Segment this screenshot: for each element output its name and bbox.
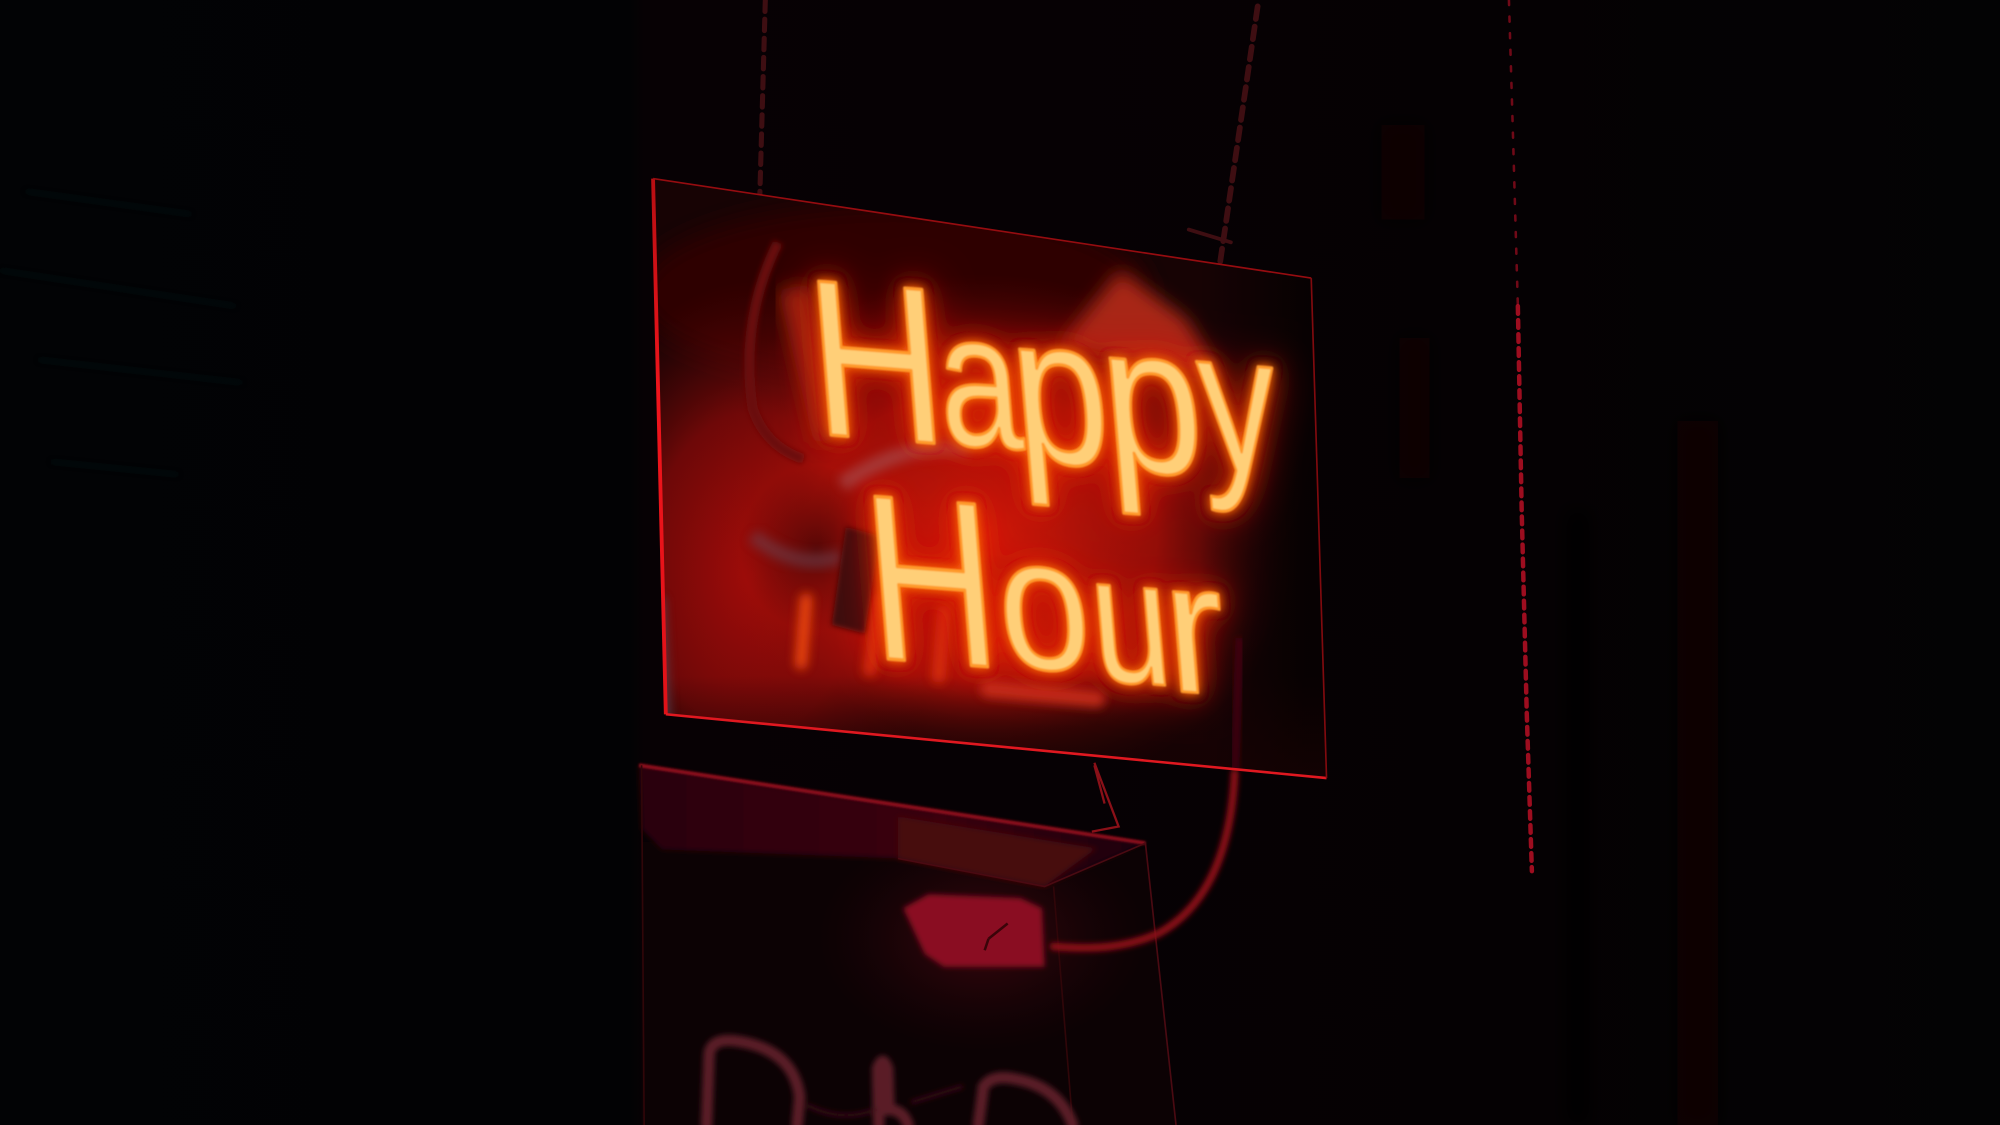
word: Happy: a [930,271,1029,491]
dim right wall strips [1381,125,1718,1125]
word: Happy [800,232,1284,521]
word: Hour: o [989,495,1097,713]
grey smear reflections [842,447,969,485]
cable seen through panel [1235,638,1240,778]
left and right chains holding the sign [759,0,1258,293]
dark right side of panel [1210,271,1324,743]
transformer box [903,894,1045,967]
word: Hour: r [1156,520,1232,736]
dark clip object [832,527,880,634]
panel interior glow [657,204,1324,768]
word: Hour: u [1083,517,1178,725]
neon sign photograph scene [636,0,1718,1125]
acrylic sign panel [651,178,1328,780]
panel right edge [1311,278,1327,778]
panel bottom edge [666,714,1327,778]
word: Happy: H [800,232,953,492]
left ghost tube [749,242,804,459]
right hanging chain [1509,0,1532,871]
word: Hour: H [856,445,1006,718]
word: Happy: y [1190,287,1284,518]
panel base fill [653,179,1327,778]
unlit lower neon tubes [707,1040,1073,1125]
panel left edge [653,179,666,714]
faint left wall streaks [0,191,242,474]
lower bracket and mounting panel [639,763,1176,1125]
dark lower strip of panel [668,684,1326,776]
word: Hour [856,445,1232,736]
word: Happy: p [1002,269,1117,512]
power cable [1054,773,1235,948]
neon lettering [800,232,1284,736]
panel top edge [653,179,1311,278]
word: Happy: p [1092,279,1211,521]
reflected triangle [1059,270,1224,383]
reflected ghost letters [801,599,1097,699]
